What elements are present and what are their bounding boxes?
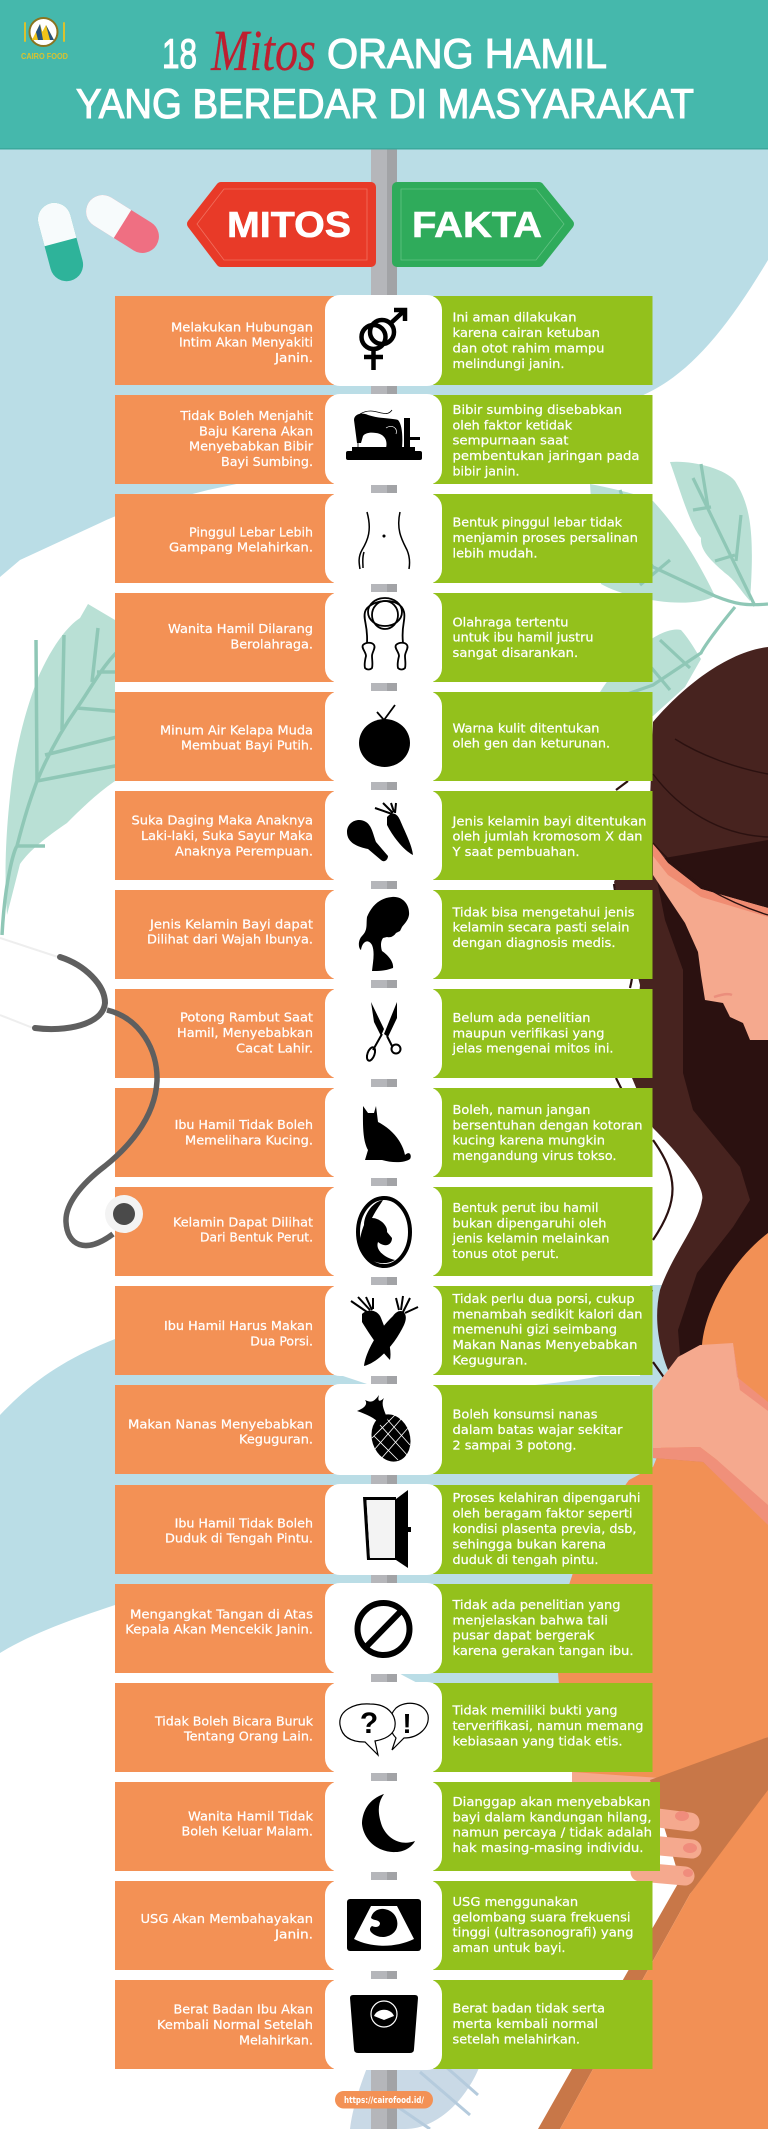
icon: two carrots (351, 1296, 418, 1366)
myth text: Mengangkat Tangan di Atas (130, 1607, 313, 1621)
icon: pineapple (357, 1395, 416, 1467)
icon: open door (363, 1490, 411, 1568)
myth text: Tentang Orang Lain. (183, 1730, 313, 1744)
fact text: menambah sedikit kalori dan (452, 1307, 642, 1321)
row 12 (115, 1384, 652, 1475)
fact text: bayi dalam kandungan hilang, (452, 1810, 652, 1824)
fact text: Bentuk pinggul lebar tidak (452, 516, 623, 530)
fact text: menjamin proses persalinan (452, 531, 638, 545)
row 7 (115, 889, 652, 980)
fact text: maupun verifikasi yang (452, 1026, 604, 1040)
fact text: menjelaskan bahwa tali (452, 1613, 608, 1627)
fact text: Bibir sumbing disebabkan (452, 403, 622, 417)
icon: waist (359, 512, 410, 569)
myth text: Suka Daging Maka Anaknya (132, 814, 313, 828)
fact text (451, 1011, 614, 1056)
row 11 (115, 1285, 652, 1376)
fact text (451, 1292, 642, 1368)
myth text: Melahirkan. (239, 2033, 313, 2047)
fact text: Belum ada penelitian (452, 1011, 590, 1025)
myth text: Pinggul Lebar Lebih (189, 525, 313, 539)
fact text (452, 1491, 640, 1567)
myth text: Memelihara Kucing. (185, 1133, 313, 1147)
row 8 (115, 988, 652, 1079)
pill: teal (34, 199, 87, 285)
icon: speech bubbles (340, 1703, 428, 1755)
fact text: Y saat pembuahan. (451, 845, 580, 859)
myth text: Dua Porsi. (250, 1334, 313, 1348)
fact text: 2 sampai 3 potong. (452, 1438, 576, 1452)
myth text (154, 1714, 314, 1744)
fact text: sehingga bukan karena (452, 1537, 606, 1551)
fact text: oleh beragam faktor seperti (452, 1507, 632, 1521)
fact text: karena cairan ketuban (452, 326, 600, 340)
myth text: Wanita Hamil Tidak (188, 1809, 314, 1823)
fact text (452, 516, 638, 560)
icon: fetus in womb (358, 1198, 410, 1266)
myth text: Cacat Lahir. (236, 1041, 313, 1055)
fact text: Keguguran. (452, 1354, 528, 1368)
myth text: Ibu Hamil Tidak Boleh (175, 1516, 313, 1530)
myth text: Makan Nanas Menyebabkan (128, 1417, 313, 1431)
fact text: hak masing-masing individu. (452, 1841, 644, 1855)
url badge (335, 2091, 433, 2108)
myth text (140, 1912, 313, 1941)
myth text: Duduk di Tengah Pintu. (165, 1532, 313, 1546)
pill: pink (80, 189, 165, 259)
myth text (128, 1417, 313, 1447)
background: top blue shape (0, 149, 768, 577)
myth text: Tidak Boleh Menjahit (179, 409, 313, 423)
title (76, 18, 694, 127)
myth text: Dari Bentuk Perut. (200, 1231, 313, 1245)
icon: speech bubbles: ? (360, 1707, 378, 1740)
myth text (168, 622, 313, 651)
myth text (182, 1809, 314, 1839)
fact text: oleh jumlah kromosom X dan (452, 830, 642, 844)
myth text: Anaknya Perempuan. (175, 844, 313, 858)
background: bottom leaf (350, 2060, 482, 2129)
fact text: pusar dapat bergerak (452, 1629, 596, 1643)
fact text: merta kembali normal (452, 2017, 598, 2031)
icon: drumstick and carrot (347, 803, 413, 861)
myth text (132, 814, 313, 858)
fact text: karena gerakan tangan ibu. (452, 1644, 634, 1658)
icon: ultrasound image (347, 1899, 421, 1951)
myth text (165, 1516, 313, 1546)
stethoscope (0, 938, 157, 1245)
fact text: namun percaya / tidak adalah (452, 1826, 652, 1840)
row 2 (115, 394, 652, 485)
fact text: untuk ibu hamil justru (452, 631, 594, 645)
myth text: Bayi Sumbing. (221, 455, 313, 469)
fact text: Boleh konsumsi nanas (452, 1408, 598, 1422)
myth text: Baju Karena Akan (199, 424, 313, 438)
fact text (452, 1895, 634, 1955)
myth text (125, 1607, 313, 1637)
fact text (451, 1201, 610, 1261)
fact text: terverifikasi, namun memang (452, 1719, 644, 1733)
fact text: memenuhi gizi seimbang (452, 1323, 617, 1337)
fact text: Dianggap akan menyebabkan (452, 1795, 650, 1809)
fact text: Berat badan tidak serta (452, 2002, 605, 2016)
myth text: Hamil, Menyebabkan (177, 1026, 313, 1040)
myth text: Gampang Melahirkan. (169, 541, 313, 555)
header band (0, 0, 768, 150)
myth text: Keguguran. (239, 1433, 313, 1447)
sign: fakta (397, 187, 569, 262)
row 10 (115, 1186, 652, 1277)
fact text: setelah melahirkan. (452, 2032, 580, 2046)
icon: gender symbols (362, 310, 405, 370)
title: YANG BEREDAR DI MASYARAKAT (76, 80, 694, 127)
sign: mitos (192, 187, 371, 262)
myth text: Tidak Boleh Bicara Buruk (154, 1714, 314, 1728)
myth text (147, 917, 313, 947)
icon: weight scale (350, 1995, 418, 2053)
icon: sewing machine (346, 410, 422, 460)
row 16 (115, 1781, 660, 1872)
fact text (451, 814, 646, 859)
fact text: Tidak ada penelitian yang (451, 1598, 620, 1612)
row 5 (115, 691, 652, 782)
logo: CAIRO FOOD (21, 52, 68, 61)
fact text: dengan diagnosis medis. (452, 936, 616, 950)
myth text: USG Akan Membahayakan (140, 1912, 313, 1926)
fact text (451, 1598, 634, 1658)
fact text: kucing karena mungkin (452, 1134, 605, 1148)
fact text: kondisi plasenta previa, dsb, (452, 1522, 636, 1536)
fact text: Boleh, namun jangan (452, 1103, 590, 1117)
fact text: kelamin secara pasti selain (452, 921, 630, 935)
myth text (179, 409, 314, 469)
row 14 (115, 1583, 652, 1674)
fact text: bukan dipengaruhi oleh (452, 1216, 606, 1230)
fact text (452, 1408, 624, 1452)
fact text: melindungi janin. (452, 357, 564, 371)
fact text: Tidak perlu dua porsi, cukup (451, 1292, 635, 1306)
myth text: Boleh Keluar Malam. (182, 1825, 313, 1839)
myth text (175, 1118, 313, 1147)
fact text: Tidak bisa mengetahui jenis (451, 905, 634, 919)
fact text: jelas mengenai mitos ini. (451, 1042, 614, 1056)
fact text (451, 1704, 644, 1748)
signpost pole (371, 149, 397, 2129)
myth text: Wanita Hamil Dilarang (168, 622, 313, 636)
fact text: Tidak memiliki bukti yang (451, 1704, 618, 1718)
myth text (157, 2003, 313, 2047)
fact text: Ini aman dilakukan (452, 311, 576, 325)
myth text: Membuat Bayi Putih. (181, 739, 313, 753)
fact text: Warna kulit ditentukan (452, 721, 600, 735)
row 13 (115, 1484, 652, 1575)
background: lower blue shape (0, 1285, 680, 1700)
fact text: dalam batas wajar sekitar (452, 1423, 624, 1437)
fact text: Bentuk perut ibu hamil (452, 1201, 598, 1215)
icon: crescent moon (362, 1794, 415, 1852)
title: Mitos (210, 18, 316, 83)
row 3 (115, 493, 652, 584)
fact text (452, 2002, 605, 2046)
fact text: gelombang suara frekuensi (452, 1910, 630, 1924)
myth text: Jenis Kelamin Bayi dapat (149, 917, 313, 931)
row 18 (115, 1979, 652, 2070)
myth text: Berat Badan Ibu Akan (174, 2003, 313, 2017)
fact text: pembentukan jaringan pada (452, 449, 640, 463)
myth text (160, 723, 313, 753)
myth text: Dilihat dari Wajah Ibunya. (147, 933, 313, 947)
myth text (169, 525, 313, 555)
myth text: Kelamin Dapat Dilihat (173, 1215, 313, 1229)
myth text: Ibu Hamil Tidak Boleh (175, 1118, 313, 1132)
fact text: Jenis kelamin bayi ditentukan (451, 814, 646, 828)
fact text: kebiasaan yang tidak etis. (452, 1734, 622, 1748)
myth text: Potong Rambut Saat (180, 1011, 313, 1025)
icon: cat (363, 1106, 411, 1162)
fact text: USG menggunakan (452, 1895, 578, 1909)
icon: jump rope (363, 598, 408, 670)
leaf: left (2, 604, 125, 935)
myth text (177, 1011, 313, 1055)
fact text (451, 905, 634, 950)
myth text (173, 1215, 313, 1245)
logo (21, 18, 68, 61)
fact text (452, 403, 640, 478)
fact text (452, 311, 604, 371)
fact text: sempurnaan saat (452, 434, 569, 448)
myth text: Melakukan Hubungan (171, 320, 313, 334)
myth text: Intim Akan Menyakiti (179, 336, 313, 350)
myth text (164, 1319, 313, 1348)
myth text: Janin. (274, 1927, 313, 1941)
fact text: duduk di tengah pintu. (452, 1553, 598, 1567)
row 9 (115, 1087, 652, 1178)
fact text: tonus otot perut. (452, 1247, 559, 1261)
row 4 (115, 592, 652, 683)
row 1 (115, 295, 652, 386)
row 17 (115, 1880, 652, 1971)
fact text (452, 721, 610, 751)
fact text: jenis kelamin melainkan (451, 1232, 610, 1246)
fact text: dan otot rahim mampu (452, 341, 604, 355)
fact text: Makan Nanas Menyebabkan (452, 1338, 638, 1352)
woman illustration (538, 647, 768, 2129)
fact text: sangat disarankan. (452, 646, 578, 660)
fact text: Proses kelahiran dipengaruhi (452, 1491, 640, 1505)
row 15 (115, 1682, 652, 1773)
title: ORANG HAMIL (327, 30, 607, 77)
fact text: bersentuhan dengan kotoran (452, 1118, 642, 1132)
myth text: Janin. (274, 351, 313, 365)
fact text: lebih mudah. (452, 546, 538, 560)
fact text: tinggi (ultrasonografi) yang (452, 1926, 634, 1940)
icon: woman head silhouette (359, 897, 409, 971)
myth text: Ibu Hamil Harus Makan (164, 1319, 313, 1333)
fact text: mengandung virus tokso. (452, 1149, 616, 1163)
fact text (452, 1103, 642, 1163)
myth text: Menyebabkan Bibir (189, 440, 314, 454)
myth text: Minum Air Kelapa Muda (160, 723, 313, 737)
fact text: bibir janin. (452, 464, 520, 478)
url badge: https://cairofood.id/ (344, 2096, 425, 2106)
sign: mitos: MITOS (227, 204, 351, 245)
fact text (452, 615, 594, 660)
fact text: Olahraga tertentu (452, 615, 568, 629)
fact text: aman untuk bayi. (452, 1941, 566, 1955)
icon: coconut (359, 705, 410, 767)
myth text: Kembali Normal Setelah (157, 2018, 313, 2032)
myth text: Laki-laki, Suka Sayur Maka (141, 829, 313, 843)
fact text: oleh gen dan keturunan. (452, 737, 610, 751)
fact text (452, 1795, 652, 1855)
myth text (171, 320, 313, 365)
fact text: oleh faktor ketidak (452, 418, 573, 432)
title: 18 (162, 30, 197, 77)
icon: scissors (365, 1002, 400, 1062)
icon: prohibition sign (358, 1603, 410, 1655)
row 6 (115, 790, 652, 881)
leaves: right (590, 462, 768, 717)
icon: speech bubbles: ! (402, 1708, 412, 1739)
sign: fakta: FAKTA (412, 204, 542, 245)
myth text: Kepala Akan Mencekik Janin. (125, 1623, 313, 1637)
myth text: Berolahraga. (230, 637, 313, 651)
